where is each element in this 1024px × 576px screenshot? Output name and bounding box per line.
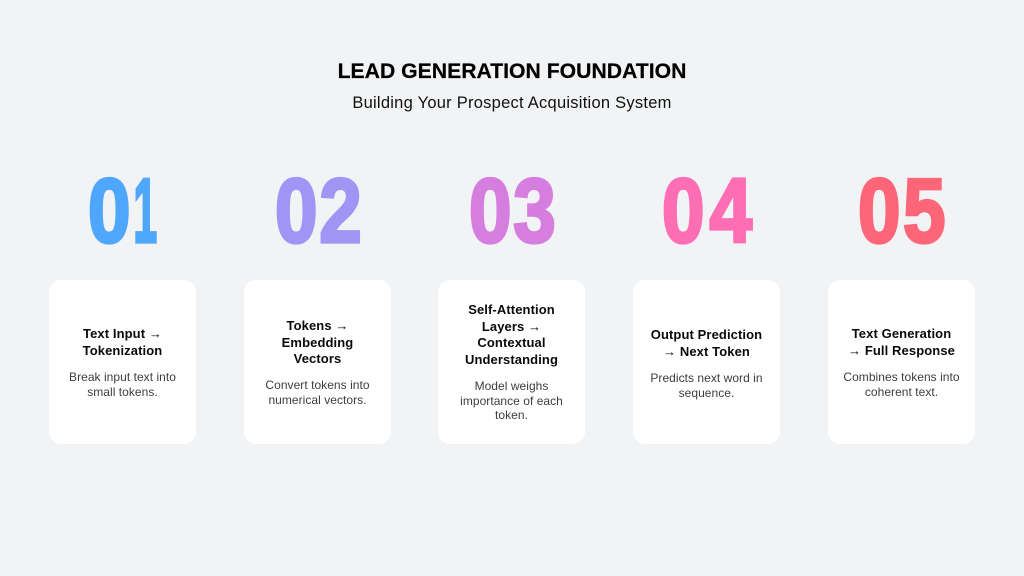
step 4 heading: Output Prediction bbox=[651, 327, 762, 342]
step 3 heading: Understanding bbox=[465, 352, 558, 367]
step 3 description: Model weighs bbox=[475, 379, 548, 393]
step number 03: 03 bbox=[469, 161, 557, 262]
step 2 heading: Tokens → bbox=[287, 318, 348, 333]
title: LEAD GENERATION FOUNDATION bbox=[338, 60, 686, 83]
step 3 heading: Layers → bbox=[482, 319, 541, 334]
step 5 description: coherent text. bbox=[865, 385, 938, 399]
step 5 description: Combines tokens into bbox=[843, 370, 960, 384]
step 3 description bbox=[460, 379, 563, 422]
panel: step 5 bbox=[828, 280, 975, 444]
step 1 heading: Tokenization bbox=[83, 343, 162, 358]
step 4 heading bbox=[651, 327, 762, 359]
step number 02: 02 bbox=[275, 161, 363, 262]
step number 04: 04 bbox=[662, 161, 757, 262]
panel: step 2 bbox=[244, 280, 391, 444]
step 3 heading bbox=[465, 302, 558, 367]
step 1 description: small tokens. bbox=[87, 385, 158, 399]
step 5 heading: → Full Response bbox=[848, 343, 955, 358]
step 2 heading bbox=[282, 318, 353, 366]
step 5 description bbox=[843, 370, 960, 399]
step 5 heading bbox=[848, 326, 955, 358]
step 1 heading: Text Input → bbox=[83, 326, 162, 341]
step 1 heading bbox=[82, 326, 162, 358]
step 3 description: importance of each bbox=[460, 394, 563, 408]
step number 01 bbox=[88, 161, 157, 262]
step 1 description: Break input text into bbox=[69, 370, 176, 384]
subtitle: Building Your Prospect Acquisition System bbox=[352, 94, 672, 112]
step 3 heading: Self-Attention bbox=[468, 302, 555, 317]
step 1 description bbox=[69, 370, 176, 399]
step number 01: 0 bbox=[88, 161, 131, 262]
step 3 heading: Contextual bbox=[477, 335, 546, 350]
step number 01: 1 bbox=[133, 161, 157, 262]
step 2 description bbox=[265, 378, 370, 407]
step number 05: 05 bbox=[858, 161, 948, 262]
step 2 heading: Embedding bbox=[282, 335, 353, 350]
panel: step 3 bbox=[438, 280, 585, 444]
step 4 heading: → Next Token bbox=[663, 344, 750, 359]
step 2 description: numerical vectors. bbox=[268, 393, 367, 407]
step 4 description: Predicts next word in bbox=[650, 371, 763, 385]
panel: step 4 bbox=[633, 280, 780, 444]
step 2 heading: Vectors bbox=[294, 351, 341, 366]
panel: step 1 bbox=[49, 280, 196, 444]
step 3 description: token. bbox=[495, 408, 528, 422]
step 4 description: sequence. bbox=[679, 386, 734, 400]
step 4 description bbox=[650, 371, 763, 400]
step 5 heading: Text Generation bbox=[852, 326, 951, 341]
step 2 description: Convert tokens into bbox=[265, 378, 370, 392]
